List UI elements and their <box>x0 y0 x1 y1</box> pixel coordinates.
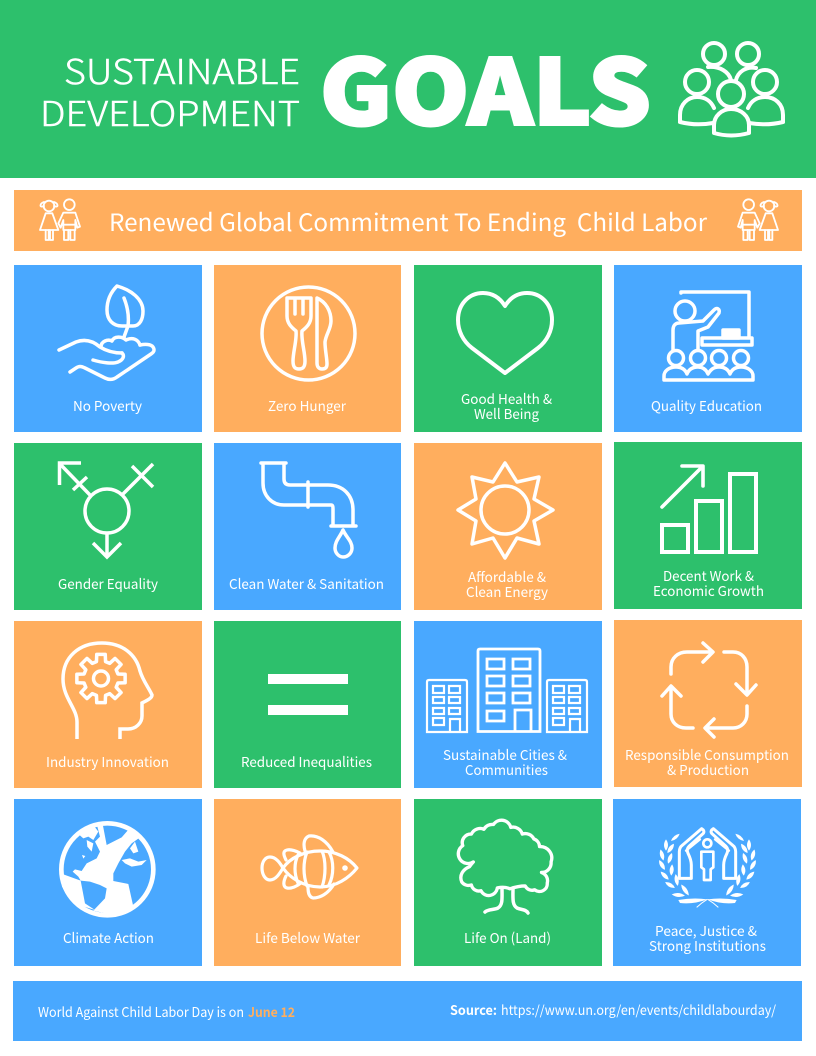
label: Peace, Justice & <box>655 920 758 940</box>
label: Clean Water & Sanitation <box>229 573 384 593</box>
emblem person <box>701 839 713 880</box>
title: goals: GOALS <box>320 20 651 150</box>
label: Communities <box>465 759 548 779</box>
label: Quality Education <box>651 395 762 415</box>
icon: tree <box>458 820 552 913</box>
label: Responsible Consumption <box>625 744 789 764</box>
icon: pipe and drop <box>261 463 356 557</box>
label <box>466 566 548 601</box>
panel: sustainable cities <box>414 621 602 788</box>
label: Gender Equality <box>58 573 158 593</box>
header band <box>0 0 816 178</box>
panel: quality education <box>614 265 802 432</box>
icon: teacher and students <box>664 292 753 380</box>
label: Industry Innovation <box>46 751 169 771</box>
subtitle: sustainable development <box>40 45 300 136</box>
icon: plate with fork and knife <box>262 287 355 380</box>
label <box>625 744 789 779</box>
label: Sustainable Cities & <box>443 744 568 764</box>
label: & Production <box>667 759 749 779</box>
subtitle: sustainable development: SUSTAINABLE <box>64 45 300 94</box>
panel: gender equality <box>14 443 202 610</box>
icon: children left <box>40 199 80 240</box>
footer bar <box>13 981 802 1041</box>
icon: children right <box>738 199 778 240</box>
banner text: Renewed Global Commitment To Ending Child Labor <box>109 203 708 238</box>
icon: group of people <box>680 43 783 136</box>
footer note: World Against Child Labor Day is on <box>38 1002 244 1021</box>
label: Strong Institutions <box>649 935 766 955</box>
label <box>443 744 568 779</box>
source: https://www.un.org/en/events/childlabourday/ <box>501 1000 776 1019</box>
panel: life below water <box>214 799 401 966</box>
label <box>653 565 764 600</box>
icon: fish <box>262 836 357 898</box>
icon: sun <box>458 463 553 558</box>
label: Well Being <box>474 403 539 423</box>
label: Decent Work & <box>663 565 755 585</box>
icon: globe <box>61 823 153 916</box>
footer note: June 12 <box>248 1002 295 1021</box>
icon: heart <box>458 293 552 373</box>
icon: transgender symbol <box>60 463 153 557</box>
banner <box>14 190 802 251</box>
panel: decent work <box>614 442 802 609</box>
panel: zero hunger <box>214 265 401 432</box>
label: Life On (Land) <box>464 927 551 947</box>
subtitle: sustainable development: DEVELOPMENT <box>40 87 300 136</box>
panel: responsible consumption <box>614 620 802 787</box>
label: No Poverty <box>73 395 142 415</box>
icon: refugee emblem <box>657 829 758 907</box>
icon: growth bars <box>662 474 756 552</box>
panel: good health <box>414 265 602 432</box>
icon: growth arrow <box>662 466 703 507</box>
icon: hand with seedling <box>59 286 154 379</box>
label: Good Health & <box>461 388 553 408</box>
panel: life on land <box>414 799 602 966</box>
icon: buildings <box>427 649 587 732</box>
label <box>461 388 553 423</box>
label: Economic Growth <box>653 580 764 600</box>
label: Clean Energy <box>466 581 548 601</box>
icon: recycling arrows <box>662 643 756 737</box>
source: Source: <box>450 1000 497 1019</box>
label: Reduced Inequalities <box>241 751 372 771</box>
emblem left half <box>657 829 707 907</box>
icon: equals sign <box>268 674 348 715</box>
panel: climate action <box>14 799 202 966</box>
panel: peace justice <box>613 799 801 966</box>
label: Affordable & <box>468 566 547 586</box>
emblem right half <box>708 829 758 907</box>
label: Life Below Water <box>255 927 361 947</box>
panel: industry innovation <box>14 621 202 788</box>
panel: no poverty <box>14 265 202 432</box>
panel: clean energy <box>414 443 602 610</box>
label <box>649 920 766 955</box>
icon: head with gear <box>63 643 152 739</box>
label: Climate Action <box>63 927 154 947</box>
panel: clean water <box>214 443 401 610</box>
label: Zero Hunger <box>268 395 347 415</box>
panel: reduced inequalities <box>214 621 401 788</box>
